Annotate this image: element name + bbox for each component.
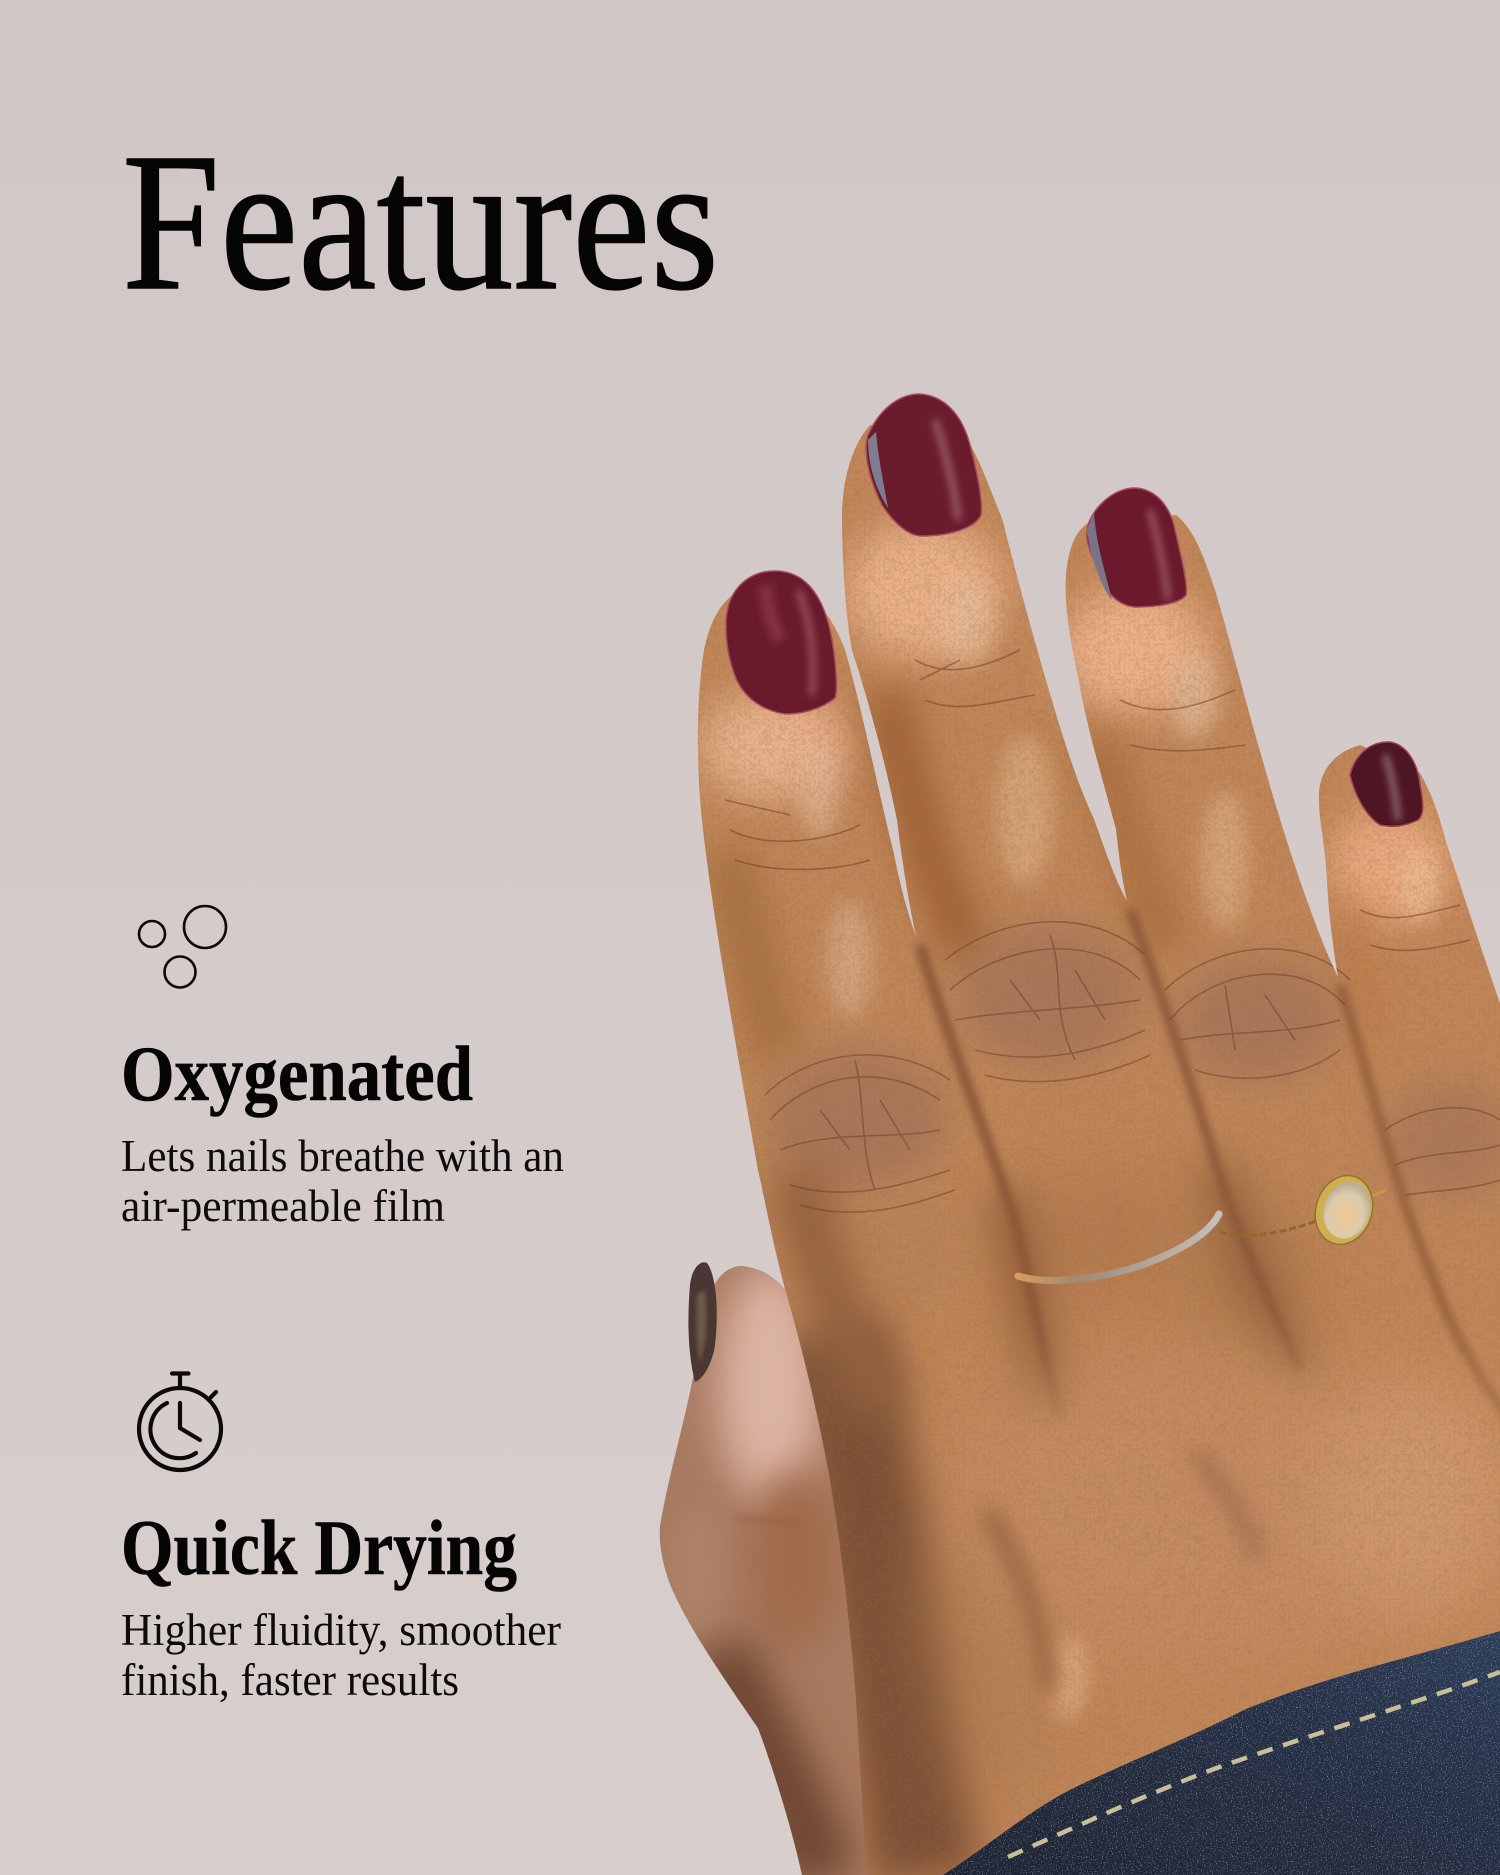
finger separations: [920, 945, 1060, 1420]
tendon folds: [985, 1510, 1050, 1690]
nail: pinky: [1350, 742, 1423, 826]
thumb nail: [688, 1262, 717, 1382]
nail: ring: [1087, 488, 1186, 607]
finger tips: [700, 690, 850, 800]
ring: gold chain with moonstone: [1220, 1168, 1386, 1252]
photo: hand with burgundy nails: [650, 380, 1500, 1875]
ring: silver twist band: [1018, 1214, 1219, 1280]
heading: Quick Drying: [121, 1504, 517, 1591]
description: [121, 1131, 564, 1231]
description: finish, faster results: [121, 1655, 459, 1705]
knuckle creases: [725, 650, 1500, 1212]
nail: middle: [866, 394, 981, 536]
nail: index: [726, 571, 836, 714]
heading: Oxygenated: [121, 1030, 473, 1117]
description: Lets nails breathe with an: [121, 1131, 564, 1181]
back of hand: [990, 1327, 1329, 1630]
finger highlights: [802, 575, 1438, 1020]
icon: bubbles: [139, 906, 226, 988]
icon: stopwatch: [139, 1374, 221, 1470]
feature: quick drying: [121, 1374, 561, 1705]
band below knuckles: [1047, 1188, 1164, 1292]
finger shading: [725, 850, 780, 1060]
description: Higher fluidity, smoother: [121, 1605, 561, 1655]
denim cuff: [940, 1630, 1500, 1875]
knuckles: [765, 1048, 949, 1192]
feature: oxygenated: [121, 906, 564, 1231]
hand and fingers: [680, 380, 1500, 1875]
description: [121, 1605, 561, 1705]
description: air-permeable film: [121, 1181, 445, 1231]
title: Features: [122, 112, 719, 331]
thumb: [660, 1266, 867, 1875]
skin texture: [680, 380, 1500, 1875]
